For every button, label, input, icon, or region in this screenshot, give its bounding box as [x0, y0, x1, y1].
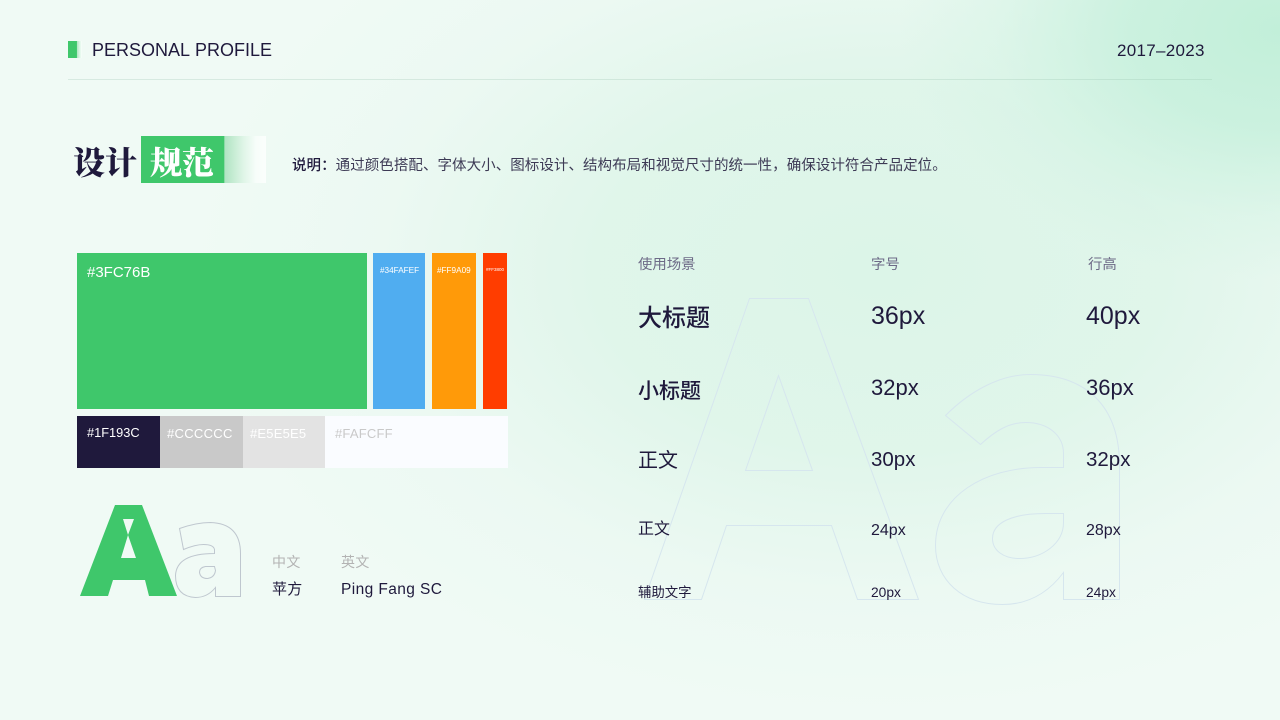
swatch: light grey: #E5E5E5 — [250, 426, 306, 441]
swatch: grey — [160, 416, 243, 468]
row 2 size: 32px — [871, 375, 919, 400]
swatch: grey: #CCCCCC — [167, 426, 233, 441]
row 4 label: 正文 — [638, 521, 670, 538]
row 3 line height: 32px — [1086, 448, 1130, 471]
row 4 size: 24px — [871, 522, 906, 539]
section heading — [73, 136, 266, 184]
large background Aa outline — [644, 298, 1120, 605]
swatch: blue — [373, 253, 425, 409]
swatch: primary green: #3FC76B — [87, 264, 150, 281]
heading green chip — [141, 136, 266, 183]
swatch: light grey — [243, 416, 325, 468]
row 5 line height: 24px — [1086, 585, 1116, 600]
font specimen Aa small — [80, 505, 241, 598]
row 5 label: 辅助文字 — [638, 585, 692, 600]
table header: usage: 使用场景 — [638, 257, 696, 273]
row 4 line height: 28px — [1086, 522, 1121, 539]
date range: 2017–2023 — [1117, 41, 1205, 60]
colour palette — [77, 253, 508, 468]
swatch: primary green — [77, 253, 367, 409]
swatch: orange: #FF9A09 — [437, 266, 471, 275]
specimen outlined a — [176, 522, 240, 598]
row 1 label: 大标题 — [638, 305, 710, 332]
row 2 line height: 36px — [1086, 375, 1134, 400]
swatch: near white — [325, 416, 508, 468]
swatch: navy — [77, 416, 160, 468]
header divider — [68, 79, 1212, 80]
row 3 label: 正文 — [638, 450, 678, 472]
description text: 说明：通过颜色搭配、字体大小、图标设计、结构布局和视觉尺寸的统一性，确保设计符合产品定位。 — [292, 158, 947, 174]
swatch: orange — [432, 253, 476, 409]
font names block — [272, 554, 442, 598]
header marker icon — [68, 41, 82, 58]
value: PingFang Chinese: 苹方 — [272, 581, 303, 598]
row 2 label: 小标题 — [638, 380, 701, 403]
row 3 size: 30px — [871, 448, 915, 471]
heading dark text: 设计 — [73, 138, 137, 184]
label: Chinese: 中文 — [272, 554, 301, 570]
swatch: red: #FF3800 — [486, 267, 504, 272]
swatch: navy: #1F193C — [87, 425, 140, 440]
swatch: red — [483, 253, 507, 409]
specimen solid A — [80, 505, 177, 596]
label: English: 英文 — [341, 554, 370, 570]
value: Ping Fang SC: Ping Fang SC — [341, 581, 442, 598]
row 1 line height: 40px — [1086, 302, 1140, 330]
table header: size: 字号 — [871, 257, 900, 273]
type scale table — [638, 256, 1140, 600]
row 1 size: 36px — [871, 302, 925, 330]
swatch: near white: #FAFCFF — [335, 426, 393, 441]
heading chip text: 规范 — [150, 138, 214, 184]
header title: PERSONAL PROFILE — [92, 40, 272, 60]
table header: line height: 行高 — [1088, 257, 1117, 273]
row 5 size: 20px — [871, 585, 901, 600]
swatch: blue: #34FAFEF — [380, 266, 419, 275]
